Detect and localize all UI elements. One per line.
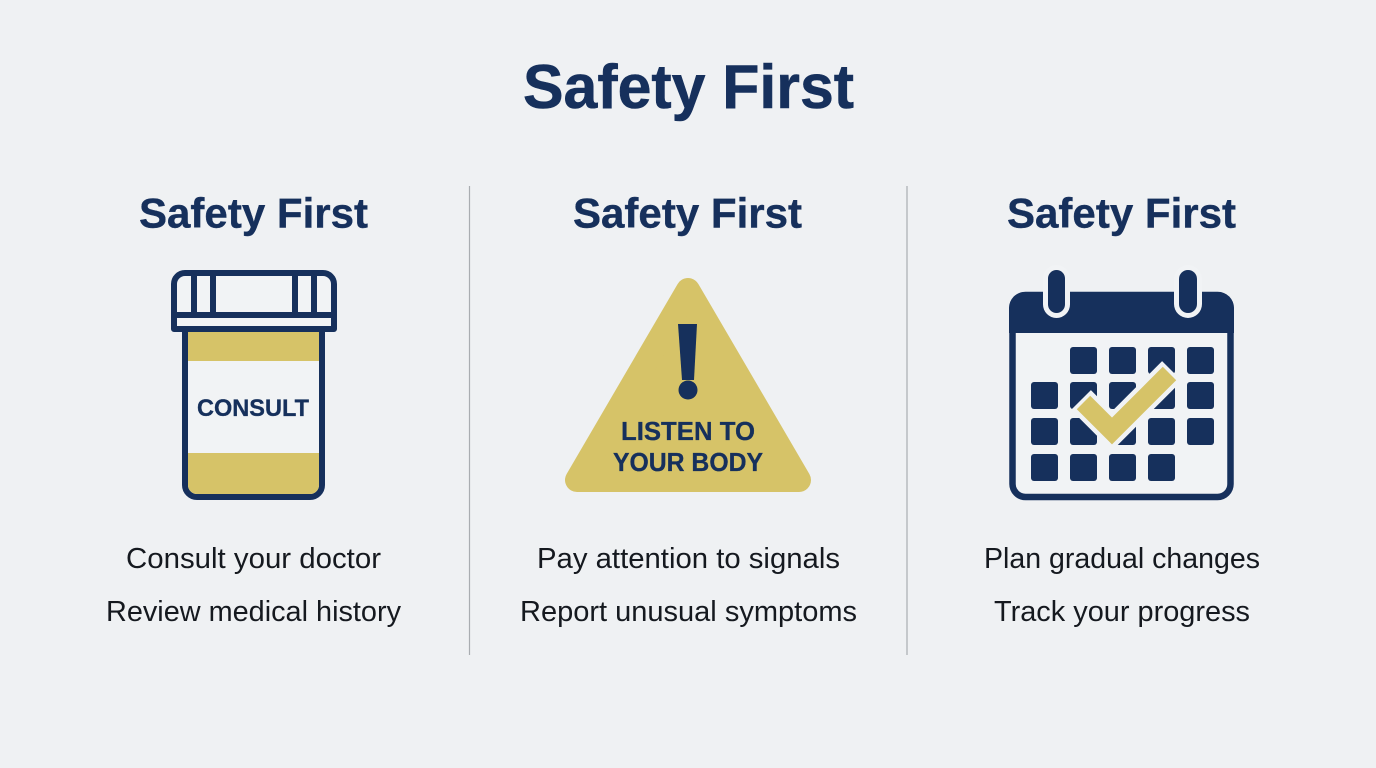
- heading: listen column: Safety First: [573, 190, 802, 236]
- text: consult line 2: Review medical history: [106, 596, 401, 628]
- heading: consult column: Safety First: [139, 190, 368, 236]
- heading: plan column: Safety First: [1007, 190, 1236, 236]
- panel: consult: [106, 190, 401, 628]
- icon label: your body: YOUR BODY: [613, 447, 763, 477]
- icon label: consult: CONSULT: [197, 395, 309, 422]
- text: plan line 1: Plan gradual changes: [984, 543, 1260, 575]
- panel: plan: [984, 190, 1260, 628]
- icon: check mark: [1084, 374, 1170, 431]
- icon: warning triangle: [577, 290, 799, 480]
- text: listen line 1: Pay attention to signals: [537, 543, 840, 575]
- title: Safety First: [523, 53, 854, 122]
- text: listen line 2: Report unusual symptoms: [520, 596, 857, 628]
- icon label: listen to: LISTEN TO: [621, 416, 755, 446]
- panel: listen: [520, 190, 857, 628]
- icon: calendar: [1009, 265, 1234, 497]
- text: plan line 2: Track your progress: [994, 596, 1250, 628]
- icon: pill bottle: [174, 273, 334, 497]
- text: consult line 1: Consult your doctor: [126, 543, 381, 575]
